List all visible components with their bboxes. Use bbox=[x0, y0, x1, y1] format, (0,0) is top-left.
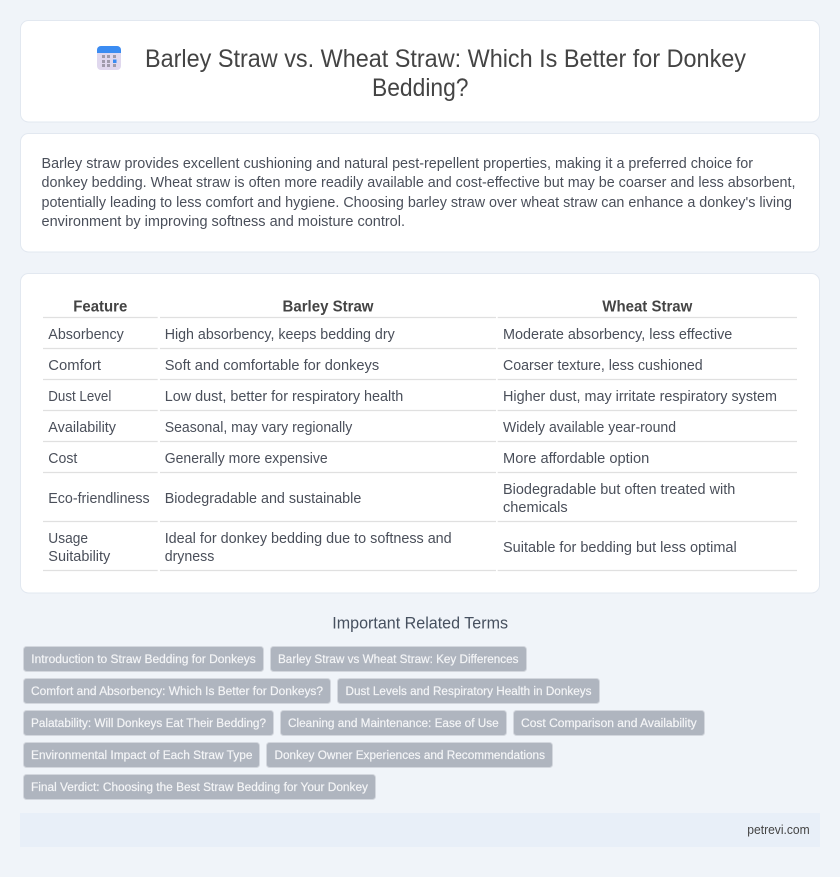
panel: comparison table bbox=[20, 274, 820, 593]
text block: description: potentially leading to less comfort and hygiene. Choosing barley straw over wheat straw can enhance a donkey's living bbox=[42, 195, 792, 211]
row: cost bbox=[48, 451, 649, 467]
row: cost: More affordable option bbox=[503, 451, 649, 467]
tag: Dust Levels and Respiratory Health in Donkeys bbox=[346, 684, 592, 698]
row: cost: Generally more expensive bbox=[165, 451, 328, 467]
row: usage suitability: dryness bbox=[165, 549, 214, 565]
row: comfort: Coarser texture, less cushioned bbox=[503, 358, 703, 374]
row: availability bbox=[48, 420, 676, 436]
row: comfort: Comfort bbox=[48, 358, 101, 374]
tag: Comfort and Absorbency: Which Is Better for Donkeys? bbox=[31, 684, 323, 698]
row: dust level: Dust Level bbox=[48, 389, 111, 405]
row: dust level: Low dust, better for respiratory health bbox=[165, 389, 403, 405]
tag: Cost Comparison and Availability bbox=[521, 716, 697, 730]
row: eco-friendliness: chemicals bbox=[503, 500, 568, 516]
row: usage suitability bbox=[48, 531, 737, 565]
tag bbox=[280, 710, 506, 736]
row: absorbency: Moderate absorbency, less effective bbox=[503, 327, 732, 343]
text block: description: donkey bedding. Wheat straw is often more readily available and cost-effective but may be coarser and less absorbent, bbox=[42, 175, 796, 191]
row: comfort: Soft and comfortable for donkeys bbox=[165, 358, 379, 374]
row: availability: Seasonal, may vary regionally bbox=[165, 420, 353, 436]
tag bbox=[24, 646, 264, 672]
row: usage suitability: Suitable for bedding but less optimal bbox=[503, 540, 737, 556]
heading: important related terms: Important Related Terms bbox=[332, 614, 508, 632]
tag bbox=[24, 742, 260, 768]
row: usage suitability: Suitability bbox=[48, 549, 111, 565]
title bbox=[145, 45, 746, 102]
row: eco-friendliness: Biodegradable and sustainable bbox=[165, 491, 361, 507]
tag: Palatability: Will Donkeys Eat Their Bedding? bbox=[31, 716, 266, 730]
tag: Cleaning and Maintenance: Ease of Use bbox=[288, 716, 499, 730]
row: eco-friendliness: Biodegradable but often treated with bbox=[503, 482, 735, 498]
panel: description bbox=[20, 134, 820, 252]
title: Barley Straw vs. Wheat Straw: Which Is Better for Donkey bbox=[145, 45, 746, 73]
tag: Environmental Impact of Each Straw Type bbox=[31, 748, 253, 762]
tag bbox=[338, 678, 600, 704]
row: usage suitability: Ideal for donkey bedding due to softness and bbox=[165, 531, 452, 547]
text block: description: Barley straw provides excellent cushioning and natural pest-repellent properties, making it a preferred choice for bbox=[42, 156, 753, 172]
tag bbox=[514, 710, 704, 736]
row: absorbency: High absorbency, keeps bedding dry bbox=[165, 327, 395, 343]
tag group: related terms bbox=[24, 646, 704, 800]
icon: calendar bbox=[97, 46, 121, 70]
table header: Wheat Straw bbox=[602, 298, 693, 316]
text block: description: environment by improving softness and moisture control. bbox=[42, 214, 405, 230]
row: dust level: Higher dust, may irritate respiratory system bbox=[503, 389, 777, 405]
tag bbox=[24, 678, 330, 704]
row: availability: Widely available year-round bbox=[503, 420, 676, 436]
tag bbox=[24, 774, 376, 800]
footer bbox=[20, 813, 820, 847]
tag: Final Verdict: Choosing the Best Straw Bedding for Your Donkey bbox=[31, 780, 369, 794]
row: eco-friendliness bbox=[48, 482, 735, 516]
title: Bedding? bbox=[372, 74, 468, 102]
footer: petrevi.com bbox=[747, 822, 810, 837]
row: absorbency bbox=[48, 327, 732, 343]
panel: header bbox=[20, 20, 820, 122]
row: dust level bbox=[48, 389, 777, 405]
tag bbox=[266, 742, 552, 768]
table header bbox=[73, 298, 693, 316]
row: cost: Cost bbox=[48, 451, 77, 467]
tag: Barley Straw vs Wheat Straw: Key Differences bbox=[278, 652, 518, 666]
row: comfort bbox=[48, 358, 703, 374]
row: availability: Availability bbox=[48, 420, 117, 436]
tag bbox=[270, 646, 526, 672]
row: usage suitability: Usage bbox=[48, 531, 88, 547]
tag: Introduction to Straw Bedding for Donkeys bbox=[31, 652, 256, 666]
tag: Donkey Owner Experiences and Recommendations bbox=[274, 748, 545, 762]
tag bbox=[24, 710, 274, 736]
row: absorbency: Absorbency bbox=[48, 327, 124, 343]
row: eco-friendliness: Eco-friendliness bbox=[48, 491, 150, 507]
table header: Feature bbox=[73, 298, 128, 316]
text block: description bbox=[42, 156, 796, 230]
table header: Barley Straw bbox=[282, 298, 374, 316]
